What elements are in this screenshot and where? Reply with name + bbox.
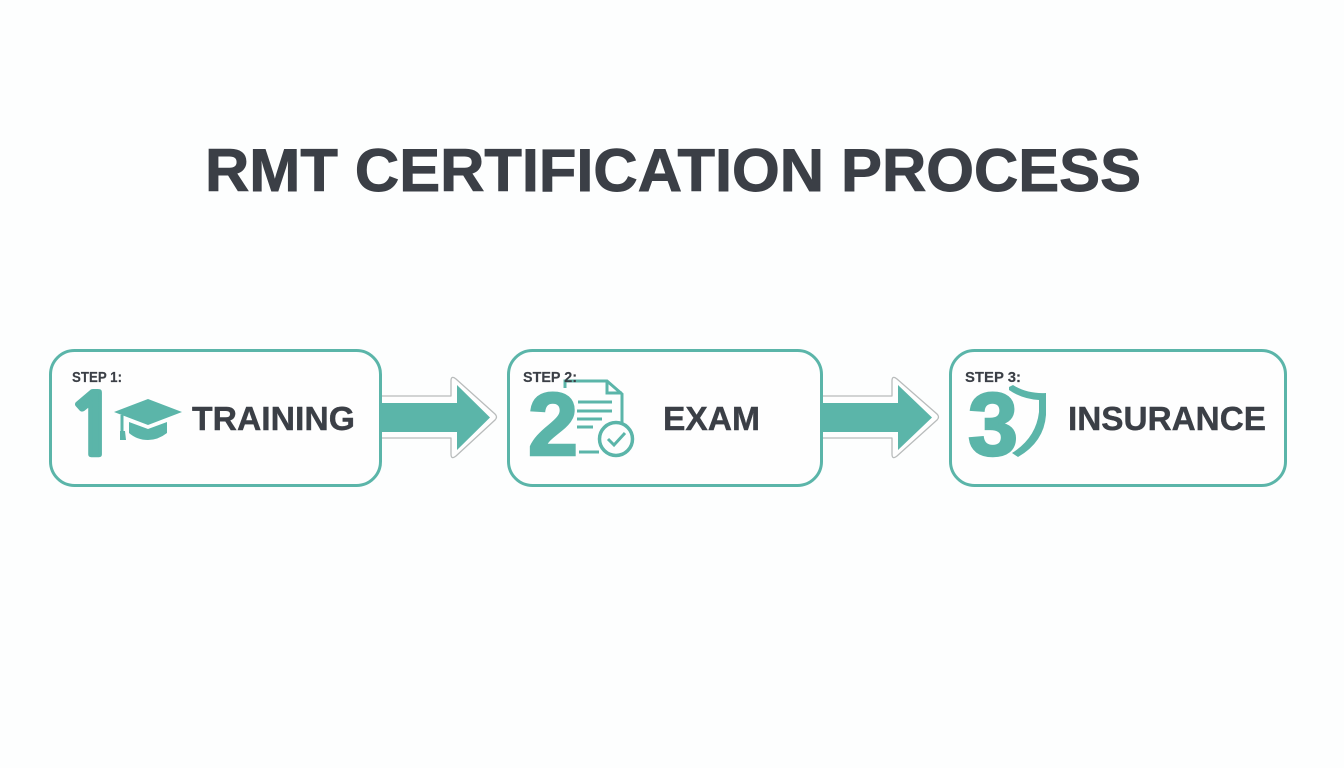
step 3 label: STEP 3: — [965, 370, 1021, 386]
step 2 label: STEP 2: — [523, 370, 577, 386]
numeral 2: 2 — [528, 374, 578, 474]
panel: step 2 exam — [508, 350, 822, 486]
panel: step 1 training — [50, 350, 380, 486]
insurance label: INSURANCE — [1068, 400, 1266, 437]
exam label: EXAM — [663, 400, 760, 437]
training label: TRAINING — [192, 400, 355, 437]
icon: exam document with check — [565, 381, 632, 456]
icon: graduation cap — [114, 399, 182, 440]
title: RMT CERTIFICATION PROCESS — [205, 137, 1141, 204]
icon: shield — [1009, 385, 1046, 457]
numeral 1: 1 — [65, 384, 121, 468]
arrow: training to exam — [380, 377, 496, 458]
panel: step 3 insurance — [950, 350, 1286, 486]
step 1 label: STEP 1: — [72, 370, 122, 386]
numeral 3: 3 — [968, 374, 1018, 474]
arrow: exam to insurance — [822, 377, 938, 458]
